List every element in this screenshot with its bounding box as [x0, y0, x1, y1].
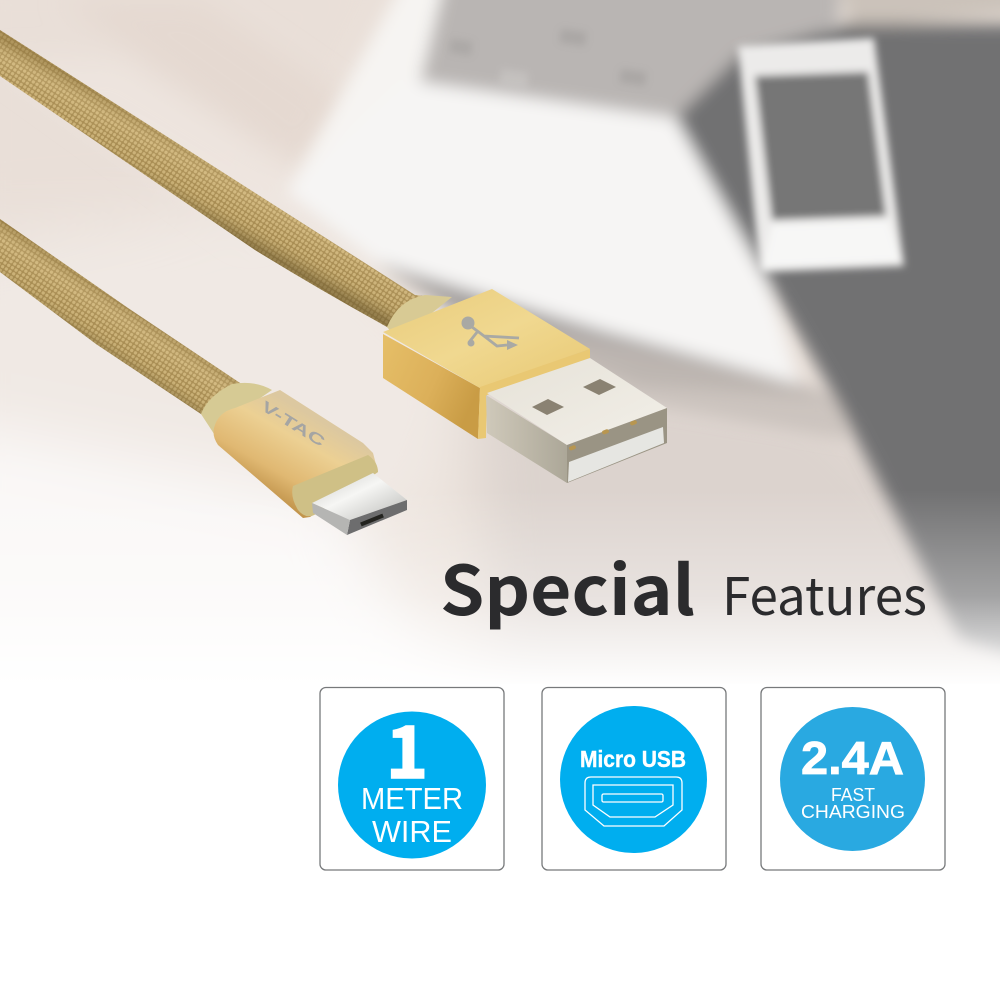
heading word: Features: Features — [722, 555, 927, 630]
USB-A plug — [383, 289, 667, 483]
badge text FAST: FAST — [831, 784, 875, 805]
badge circle: 1 meter wire — [338, 712, 486, 858]
badge numeral 1: 1 — [386, 694, 428, 799]
badge text Micro USB: Micro USB — [580, 746, 686, 772]
V-TAC logo on barrel: V-TAC — [258, 398, 328, 451]
USB-A metal connector — [486, 358, 667, 483]
panel: micro USB — [542, 688, 726, 870]
badge text CHARGING: CHARGING — [801, 801, 905, 822]
gold braided cable to micro USB plug — [0, 219, 243, 416]
badge text 2.4A: 2.4A — [801, 732, 904, 784]
micro USB metal tip — [312, 473, 407, 535]
badge text METER: METER — [361, 781, 463, 816]
USB-A trident logo — [462, 316, 519, 350]
heading word: Special: Special — [440, 536, 695, 635]
badge text WIRE: WIRE — [372, 814, 452, 849]
gold braided cable to USB-A plug — [0, 30, 425, 328]
badge circle: fast charging — [780, 707, 925, 851]
micro USB strain relief — [201, 383, 272, 440]
panel: 1 meter wire — [320, 688, 504, 870]
micro USB collar — [292, 455, 378, 516]
micro USB gold barrel — [214, 390, 378, 518]
panel: 2.4A fast charging — [761, 688, 945, 870]
USB-A gold shell — [383, 289, 590, 439]
badge circle: micro USB — [560, 706, 707, 853]
heading: Special Features — [440, 536, 927, 635]
icon: micro USB port — [585, 777, 682, 826]
USB-A strain relief — [387, 295, 452, 340]
micro USB plug — [201, 383, 407, 535]
